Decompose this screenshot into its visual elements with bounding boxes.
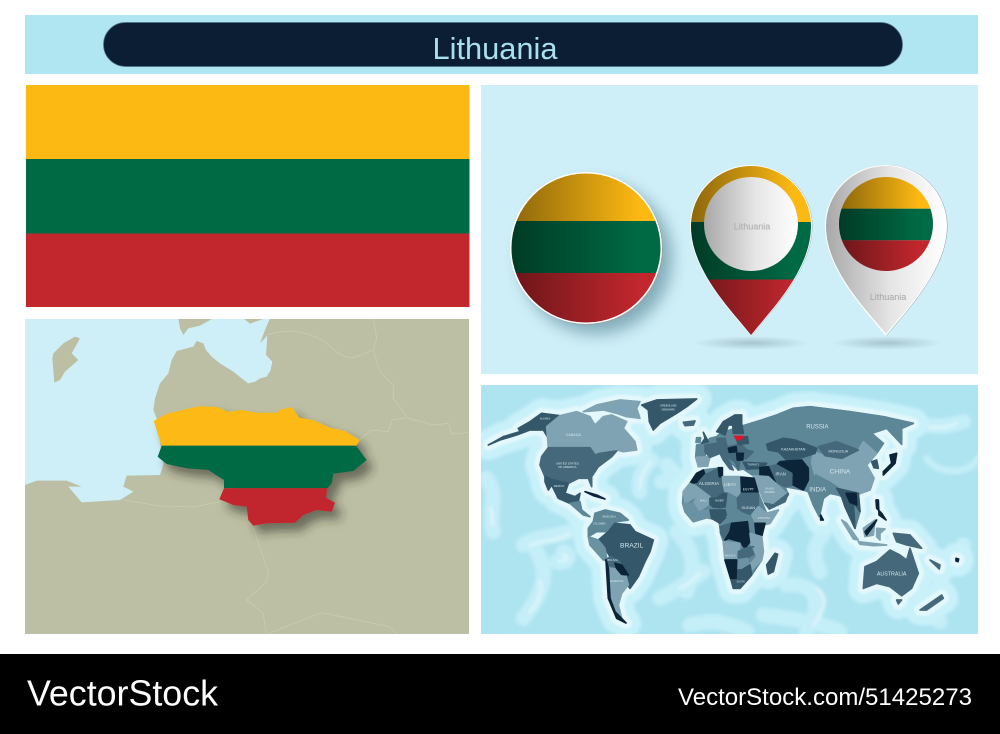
ocean currents (487, 422, 978, 632)
country labels: BOLIVIA (607, 558, 618, 562)
country labels: IRAN (775, 472, 786, 477)
country labels: ETHIOPIA (758, 516, 770, 520)
icon: Lithuania country shape in flag colours (150, 400, 370, 528)
country labels: MALI (700, 499, 707, 503)
country labels: EGYPT (743, 488, 754, 492)
country labels: NIGER (715, 498, 724, 502)
country labels: KAZAKHSTAN (781, 447, 806, 451)
icon: silver map pin (825, 165, 948, 350)
country labels: BRAZIL (620, 542, 644, 549)
country labels: COLOMBIA (593, 522, 606, 525)
country labels: SAUDI (765, 486, 774, 490)
panel: national flag (26, 85, 470, 307)
country labels: MONGOLIA (828, 449, 849, 453)
panel: flag markers (481, 85, 978, 374)
country labels: LIBYA (724, 482, 736, 487)
icon: round flag badge (510, 170, 672, 334)
country labels: DENMARK (662, 407, 675, 411)
country labels (540, 404, 907, 584)
Lithuania marker (733, 436, 743, 442)
footer bar (0, 654, 1000, 734)
coastal halo (488, 399, 959, 623)
country labels: ANGOLA (724, 553, 736, 557)
Baltic Sea (25, 318, 272, 502)
country labels: INDIA (809, 487, 827, 494)
icon: silver map pin: Lithuania (870, 292, 906, 302)
image id text: VectorStock.com/51425273 (678, 684, 972, 711)
title banner (25, 15, 978, 74)
country labels: ALGERIA (699, 481, 720, 486)
country labels: MEXICO (554, 484, 564, 488)
logo text: VectorStock (27, 672, 219, 714)
country borders (123, 318, 469, 634)
country labels: ARGENTINA (610, 580, 624, 583)
icon: flag map pin: Lithuania (734, 222, 770, 232)
country labels: ALASKA (540, 417, 550, 421)
country labels: GREENLAND (660, 404, 677, 408)
country labels: VENEZUELA (602, 516, 616, 519)
country labels: SOUTH (737, 582, 745, 584)
country labels: AUSTRALIA (877, 572, 907, 578)
country labels: TURKEY (747, 462, 759, 466)
icon: flag map pin (690, 165, 812, 350)
country labels: SUDAN (741, 505, 755, 510)
country labels: ARABIA (764, 490, 775, 494)
country labels: CHINA (830, 468, 851, 475)
country labels: OF AMERICA (558, 465, 577, 469)
country labels: RUSSIA (806, 424, 828, 430)
title banner: Lithuania (432, 31, 558, 66)
country labels: UNITED STATES (556, 461, 579, 465)
country labels: CANADA (566, 433, 582, 437)
panel: world map (481, 385, 978, 634)
panel: regional map of Lithuania (25, 318, 469, 634)
islands (52, 318, 265, 383)
